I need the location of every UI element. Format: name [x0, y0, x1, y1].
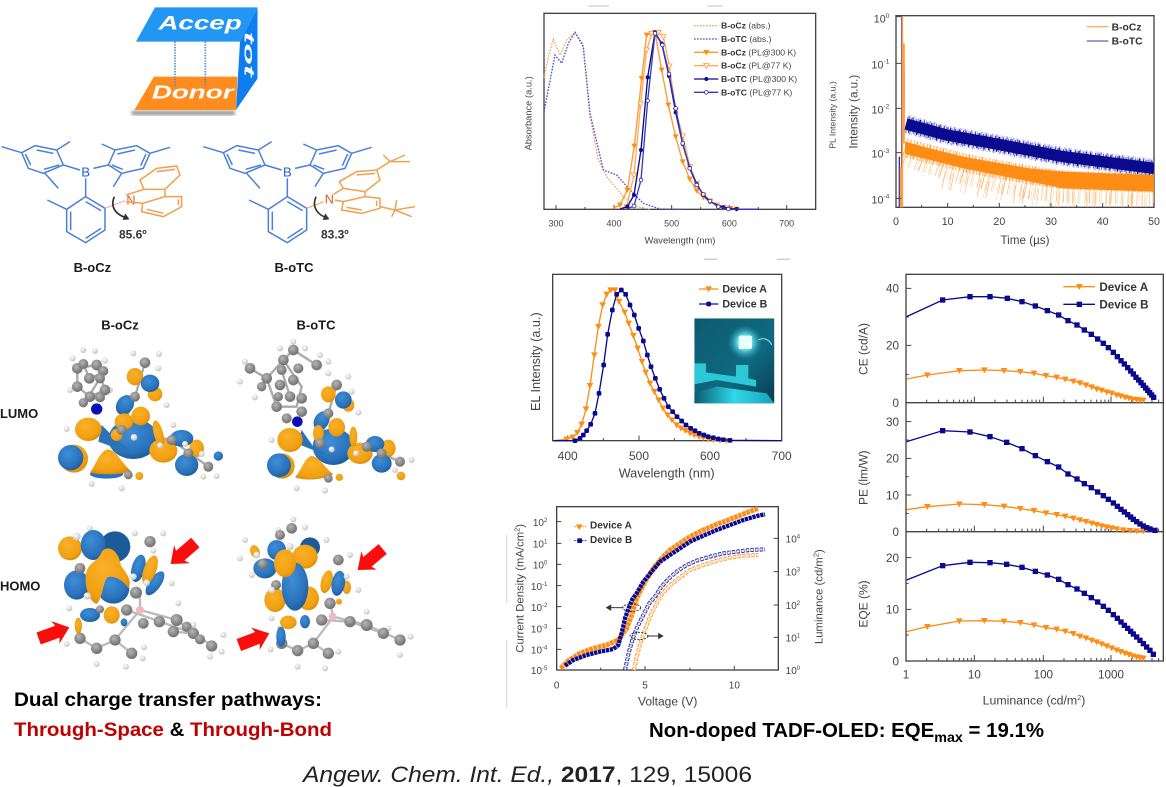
right y tick labels: 10 — [786, 666, 797, 677]
series: B-oTC absorbance — [544, 32, 683, 209]
y tick labels: -1 — [883, 59, 890, 66]
icon: acceptor donor stacked cube: Donor — [152, 82, 236, 103]
y tick labels: 0 — [893, 397, 900, 410]
y tick labels: 10 — [874, 14, 886, 26]
legend — [694, 21, 797, 97]
legend — [1063, 281, 1149, 312]
text: non-doped TADF-OLED result: Non-doped TADF-OLED: EQE — [649, 720, 929, 742]
y tick labels: 0 — [886, 13, 890, 20]
label: HOMO: HOMO — [0, 579, 40, 594]
x tick labels: 0 — [554, 680, 560, 691]
legend: B-oTC (abs.) — [721, 34, 772, 44]
legend: Device A — [1099, 281, 1149, 294]
legend: B-oTC (PL@77 K) — [721, 87, 792, 97]
chart: absorbance and PL spectra — [523, 6, 816, 259]
x axis title: Wavelength (nm) — [619, 466, 715, 480]
arrow: through-bond pathway, lower right molecule — [235, 622, 274, 656]
heading: B-oTC: B-oTC — [297, 317, 336, 332]
clipped original y axis title: PL Intensity (a.u.) — [827, 81, 837, 149]
axis tick labels: 400 — [606, 219, 621, 229]
arrow: through-space pathway, upper left molecule — [163, 534, 203, 573]
x tick labels: 50 — [1148, 216, 1160, 228]
arrow: through-bond pathway, lower left molecule — [35, 616, 73, 650]
x tick labels: 700 — [772, 449, 792, 463]
axis tick labels: 700 — [779, 219, 794, 229]
y axis title: Absorbance (a.u.) — [523, 76, 533, 150]
legend: B-oTC (PL@300 K) — [721, 74, 797, 84]
left y axis title: ) — [514, 524, 526, 528]
x axis title: Wavelength (nm) — [645, 235, 715, 245]
legend: Device B — [590, 535, 632, 546]
series: B-oTC PL 77 K — [627, 33, 758, 209]
right y axis title: Luminance (cd/m — [813, 557, 825, 644]
axis tick labels: 300 — [548, 219, 563, 229]
label: B-oTC: B-oTC — [275, 260, 314, 275]
right y axis title: ) — [813, 549, 825, 553]
series: device A current density — [561, 508, 758, 668]
y axis title: Intensity (a.u.) — [847, 75, 860, 149]
x axis title: Luminance (cd/m — [983, 693, 1077, 707]
text: through-space and through-bond: Through-Space & Through-Bond — [14, 720, 332, 741]
y tick labels: 20 — [886, 340, 900, 353]
x tick labels: 400 — [558, 449, 578, 463]
series: B-oTC PL 300 K — [620, 32, 757, 209]
y tick labels: 10 — [872, 104, 883, 116]
left y tick labels: 10 — [531, 603, 542, 614]
legend: Device B — [722, 299, 768, 311]
right y tick labels: 10 — [786, 601, 797, 612]
x tick labels — [554, 680, 740, 691]
x tick labels: 10 — [942, 216, 954, 228]
left y tick labels: -4 — [542, 646, 548, 652]
x axis title: ) — [1081, 693, 1085, 707]
right y tick labels: 2 — [797, 601, 801, 607]
left y tick labels: 10 — [533, 540, 544, 551]
left y tick labels: 10 — [531, 625, 542, 636]
y tick labels: -4 — [883, 194, 890, 201]
legend — [699, 283, 768, 311]
series: device B current density — [565, 514, 765, 666]
x tick labels: 30 — [1045, 216, 1057, 228]
x tick labels: 10 — [729, 680, 740, 691]
text: non-doped TADF-OLED result: max — [934, 729, 963, 745]
legend — [574, 520, 632, 546]
left y tick labels: 10 — [533, 518, 544, 529]
right y tick labels — [786, 534, 801, 677]
label: B-oCz: B-oCz — [74, 260, 112, 275]
x axis title: 2 — [1077, 693, 1081, 702]
y axis titles: CE (cd/A) — [857, 323, 871, 375]
axis tick labels: 600 — [722, 219, 737, 229]
orbital: LUMO of B-oTC — [237, 339, 415, 494]
chart: J-V-L characteristics — [507, 507, 825, 709]
series: device A luminance — [634, 555, 758, 670]
x axis title: Time (µs) — [1000, 234, 1050, 247]
right y tick labels: 4 — [797, 534, 801, 540]
y tick labels: -3 — [883, 148, 890, 155]
icon: acceptor donor stacked cube: Accep — [157, 13, 242, 34]
chart: transient PL decay — [827, 13, 1160, 247]
series: B-oCz PL 300 K — [612, 32, 750, 209]
x tick labels — [558, 449, 792, 463]
x tick labels: 20 — [993, 216, 1005, 228]
left y tick labels: -3 — [542, 625, 548, 631]
right y tick labels: 10 — [786, 568, 797, 579]
text: non-doped TADF-OLED result: = 19.1% — [963, 720, 1044, 742]
x tick labels: 600 — [700, 449, 720, 463]
right y tick labels: 10 — [786, 633, 797, 644]
y tick labels: 40 — [886, 283, 900, 296]
right y tick labels: 10 — [786, 534, 797, 545]
icon: acceptor donor stacked cube: tot — [241, 32, 257, 80]
molecule: B-oTC structure — [203, 142, 415, 243]
series: B-oCz absorbance — [544, 32, 650, 209]
molecule: B-oCz structure: 85.6º — [119, 228, 147, 242]
series: device B luminance — [625, 549, 765, 670]
x tick labels: 0 — [893, 216, 899, 228]
left y tick labels: 10 — [531, 646, 542, 657]
orbital: HOMO of B-oCz — [58, 525, 226, 670]
orbital: HOMO of B-oTC — [237, 516, 414, 671]
axis tick labels — [548, 219, 794, 229]
legend: B-oCz (abs.) — [721, 21, 771, 31]
sub-chart: current efficiency — [907, 297, 1154, 400]
chart: CE, PE and EQE versus luminance — [857, 274, 1163, 707]
y tick labels: 10 — [886, 489, 900, 502]
x tick labels: 1000 — [1098, 668, 1124, 681]
y tick labels: 10 — [872, 194, 883, 206]
y tick labels: 10 — [872, 59, 883, 71]
molecule: B-oCz structure — [2, 142, 182, 243]
left y axis title: Current Density (mA/cm — [514, 532, 526, 653]
y tick labels: 0 — [893, 655, 900, 668]
y tick labels: 0 — [893, 526, 900, 539]
right y tick labels: 3 — [797, 568, 801, 574]
panel: frontier orbitals LUMO and HOMO — [0, 317, 415, 671]
molecule: B-oTC structure: B — [283, 165, 292, 180]
left y tick labels — [531, 518, 548, 677]
legend — [1087, 22, 1143, 48]
x tick labels: 1 — [903, 668, 909, 681]
sub-chart: external quantum efficiency — [907, 562, 1153, 658]
molecule: B-oCz structure: B — [81, 165, 90, 180]
series: B-oCz PL 77 K — [620, 32, 737, 209]
legend: Device A — [590, 520, 632, 531]
left y tick labels: -2 — [542, 603, 548, 609]
left y tick labels: -1 — [542, 582, 548, 588]
molecule: B-oCz structure: N — [126, 194, 136, 208]
y tick labels: 10 — [872, 149, 883, 161]
y tick labels — [872, 13, 890, 206]
left y tick labels: 2 — [544, 518, 548, 524]
y axis title: EL Intensity (a.u.) — [529, 312, 543, 411]
left y axis title: 2 — [512, 528, 521, 532]
panel: donor-acceptor schematic and molecular structures — [2, 7, 415, 275]
heading: B-oCz: B-oCz — [101, 317, 139, 332]
orbital: LUMO of B-oCz — [58, 347, 223, 491]
y tick labels: 20 — [886, 552, 900, 565]
x tick labels — [903, 668, 1124, 681]
series: B-oTC decay — [899, 17, 1154, 207]
legend: B-oCz (PL@77 K) — [721, 61, 791, 71]
left y tick labels: -5 — [542, 666, 548, 672]
axis tick labels: 500 — [664, 219, 679, 229]
arrow: right axis indicator — [630, 632, 663, 640]
left y tick labels: 0 — [544, 561, 548, 567]
y tick labels — [886, 283, 900, 668]
right y tick labels: 1 — [797, 633, 801, 639]
molecule: B-oTC structure: N — [325, 193, 334, 207]
arrow: through-space pathway, upper right molecule — [350, 540, 390, 579]
text: dual charge transfer pathways: Dual charge transfer pathways: — [14, 690, 322, 711]
right y tick labels: 0 — [797, 666, 801, 672]
series: device B EL — [553, 290, 782, 441]
series: device A EL — [553, 290, 782, 441]
molecule: B-oTC structure: 83.3º — [321, 228, 349, 242]
legend: B-oTC — [1112, 37, 1143, 48]
legend: Device B — [1099, 299, 1149, 312]
text: citation: Angew. Chem. Int. Ed., 2017, 129, 15006 — [301, 762, 752, 787]
x axis title: Voltage (V) — [638, 695, 697, 709]
y tick labels: -2 — [883, 104, 890, 111]
y tick labels: 30 — [886, 416, 900, 429]
x tick labels: 5 — [642, 680, 648, 691]
left y tick labels: 10 — [531, 666, 542, 677]
icon: acceptor donor stacked cube — [132, 7, 258, 115]
sub-chart: power efficiency — [907, 431, 1155, 531]
y tick labels: 10 — [886, 604, 900, 617]
x tick labels: 40 — [1097, 216, 1109, 228]
left y tick labels: 1 — [544, 540, 548, 546]
arrow: left axis indicator — [607, 604, 641, 611]
left y tick labels: 10 — [533, 561, 544, 572]
legend: B-oCz — [1112, 22, 1142, 33]
y axis titles: EQE (%) — [857, 580, 871, 628]
inset photo: glowing OLED device — [694, 318, 774, 403]
series: B-oCz decay — [901, 17, 1154, 207]
x tick labels — [893, 216, 1160, 228]
label: LUMO: LUMO — [0, 406, 38, 421]
y axis titles: PE (lm/W) — [857, 450, 871, 505]
x tick labels: 500 — [629, 449, 649, 463]
y tick labels: 20 — [886, 453, 900, 466]
legend: Device A — [722, 283, 767, 295]
left y tick labels: 10 — [531, 582, 542, 593]
x tick labels: 10 — [968, 668, 981, 681]
y axis titles — [857, 323, 871, 628]
chart: EL spectra — [529, 274, 792, 480]
x tick labels: 100 — [1034, 668, 1054, 681]
right y axis title: 2 — [811, 553, 820, 557]
legend: B-oCz (PL@300 K) — [721, 47, 796, 57]
